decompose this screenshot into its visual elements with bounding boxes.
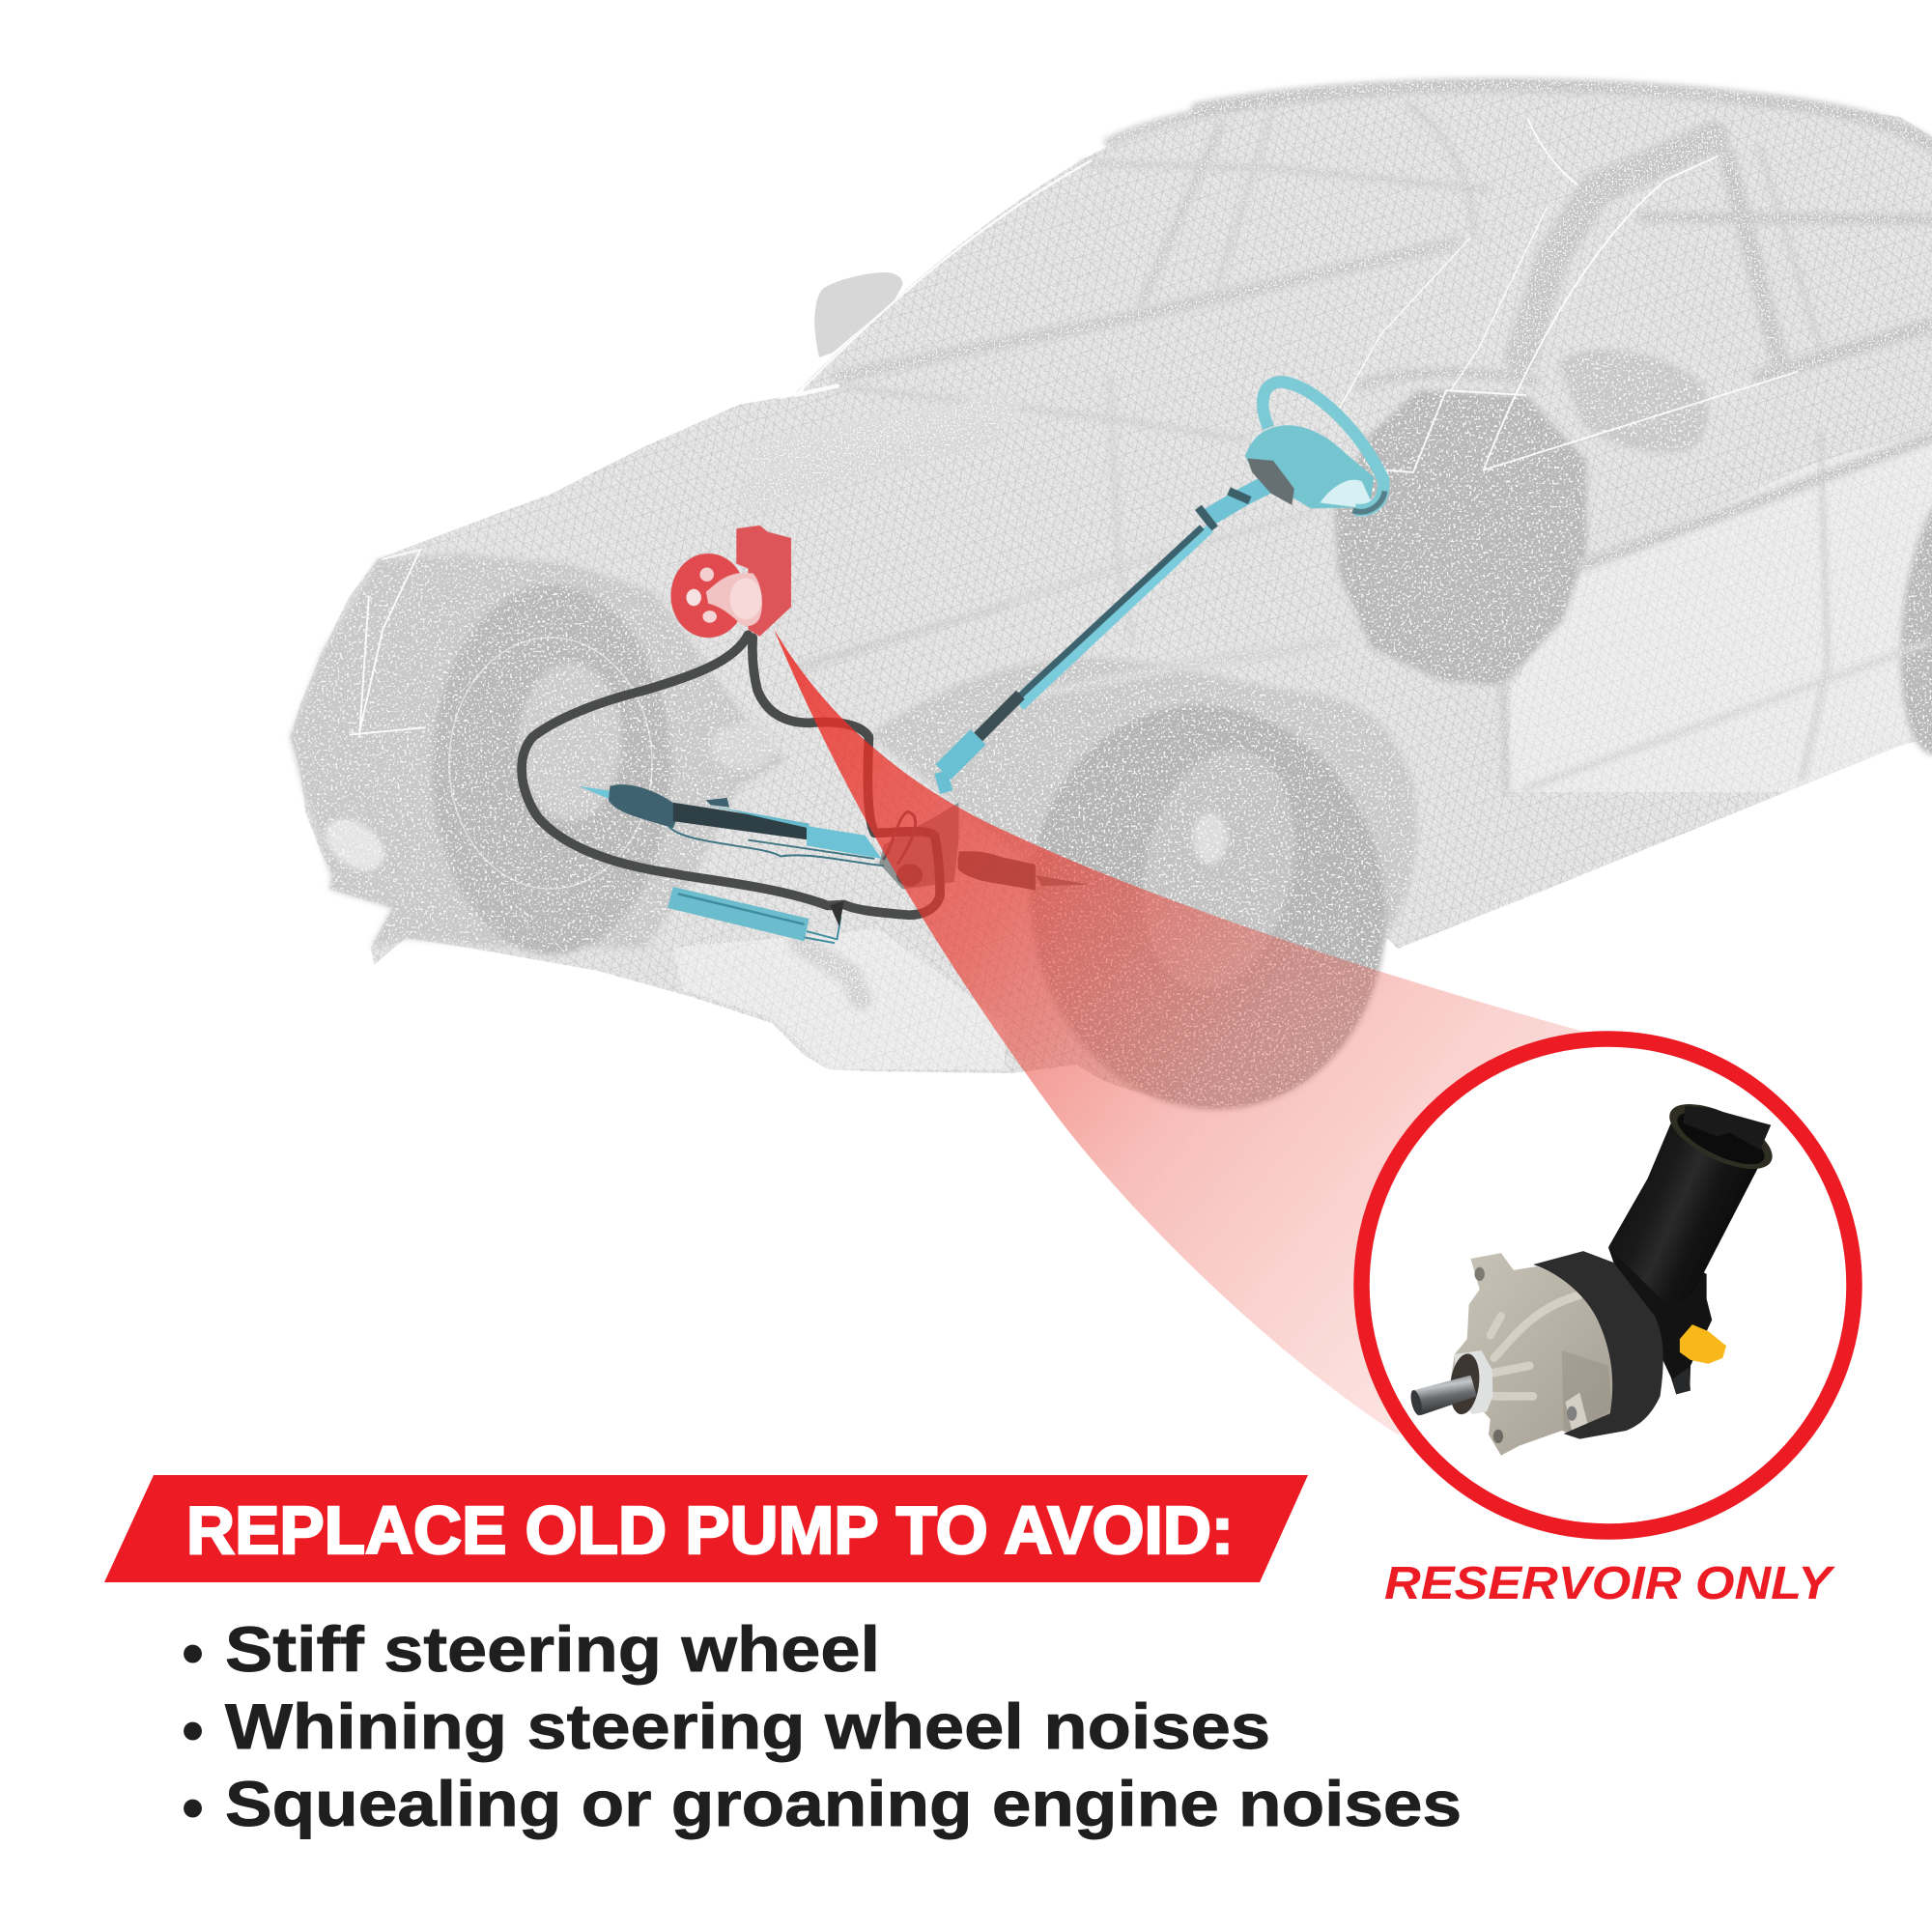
banner heading: REPLACE OLD PUMP TO AVOID: xyxy=(186,1492,1234,1568)
dark zones: nose and wheels xyxy=(290,350,1932,1138)
housing casting ribs xyxy=(1491,1295,1579,1396)
light rear panel xyxy=(1507,433,1932,792)
body structure bands xyxy=(753,85,1932,999)
car body silhouette xyxy=(290,79,1932,1106)
mesh lines xyxy=(270,58,1932,1121)
aluminium housing xyxy=(1451,1253,1614,1456)
hose nipple xyxy=(1673,1368,1690,1394)
bullet 1: • xyxy=(182,1617,204,1689)
light lower bumper xyxy=(673,929,1005,1069)
black band xyxy=(1533,1251,1663,1439)
steering system xyxy=(522,382,1384,943)
rear black block xyxy=(1608,1247,1712,1394)
pulley xyxy=(670,554,746,638)
bullet 3: • xyxy=(182,1772,204,1843)
valve housing xyxy=(879,803,959,889)
pump shaft xyxy=(1412,1376,1477,1415)
white highlight seams xyxy=(350,119,1797,889)
caption: reservoir only: RESERVOIR ONLY xyxy=(1384,1558,1835,1609)
rack end xyxy=(958,852,1090,891)
side mirror xyxy=(814,272,902,357)
shaft collar xyxy=(1455,1350,1492,1414)
oil cooler xyxy=(668,887,844,943)
reservoir xyxy=(736,526,791,637)
wheel rim xyxy=(1263,382,1383,510)
pump body xyxy=(706,573,762,626)
power steering hoses xyxy=(522,635,940,915)
yellow bypass valve xyxy=(1680,1324,1726,1364)
wireframe car xyxy=(270,58,1932,1138)
banner xyxy=(104,1475,1308,1582)
red highlight beam xyxy=(774,629,1604,1435)
steering rack xyxy=(579,784,1005,885)
item 2: Whining steering wheel noises xyxy=(225,1690,1270,1762)
mounting bolts xyxy=(1475,1267,1485,1281)
red pump diagram xyxy=(670,526,791,638)
bullet 2: • xyxy=(182,1694,204,1766)
item 1: Stiff steering wheel xyxy=(225,1613,880,1685)
reservoir rim xyxy=(1662,1091,1780,1182)
reservoir tube xyxy=(1608,1123,1758,1308)
wheel hub xyxy=(1245,425,1374,508)
steering column and wheel xyxy=(941,382,1384,792)
item 3: Squealing or groaning engine noises xyxy=(225,1768,1462,1839)
product photo: power steering pump xyxy=(1408,1091,1780,1456)
magnifier circle xyxy=(1362,1039,1855,1532)
filler cap xyxy=(1684,1106,1771,1150)
symptom list xyxy=(182,1613,1462,1843)
banner shape xyxy=(104,1475,1308,1582)
